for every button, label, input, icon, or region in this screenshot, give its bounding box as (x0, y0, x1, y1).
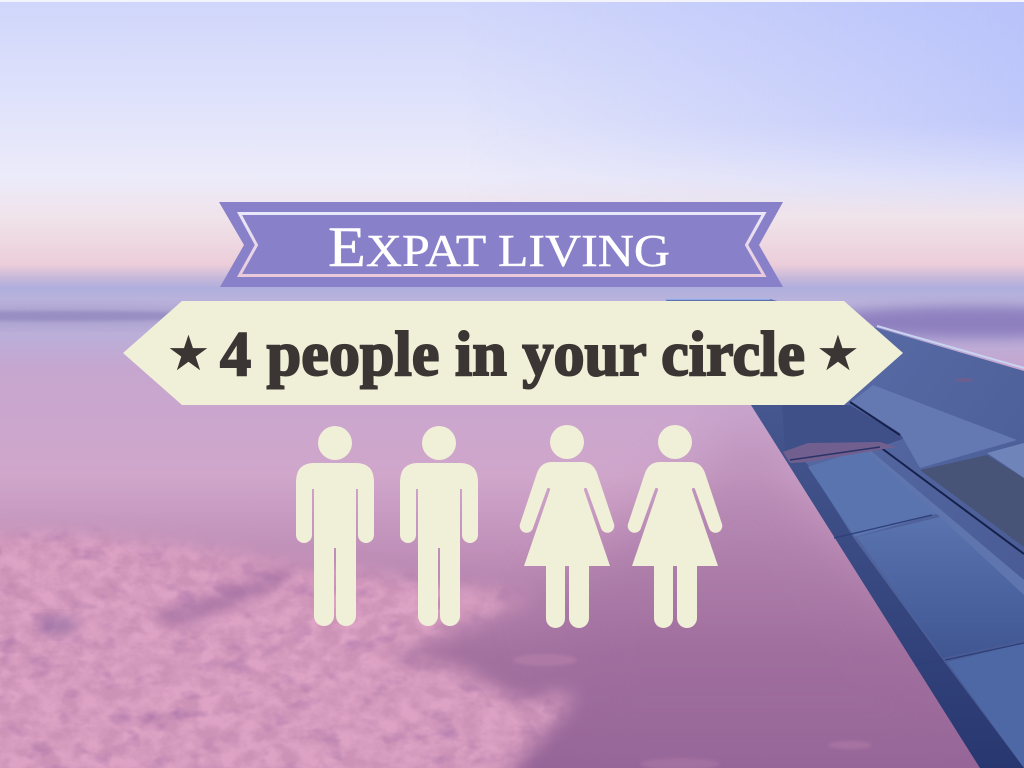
right star: ★ (816, 325, 860, 382)
icon: man 1 (296, 426, 374, 626)
icon: woman 2 (628, 425, 722, 628)
clouds (0, 431, 870, 768)
banner inner outline (240, 214, 764, 276)
airplane wing (665, 299, 1024, 768)
left star: ★ (167, 325, 210, 382)
arrow banner: 4 people in your circle (123, 301, 903, 405)
banner: expat living (219, 202, 783, 287)
icon: man 2 (400, 426, 478, 626)
main heading: 4 people in your circle (220, 319, 805, 389)
people icons (296, 425, 722, 628)
icon: woman 1 (520, 425, 614, 628)
banner heading: EXPAT LIVING (328, 216, 670, 279)
